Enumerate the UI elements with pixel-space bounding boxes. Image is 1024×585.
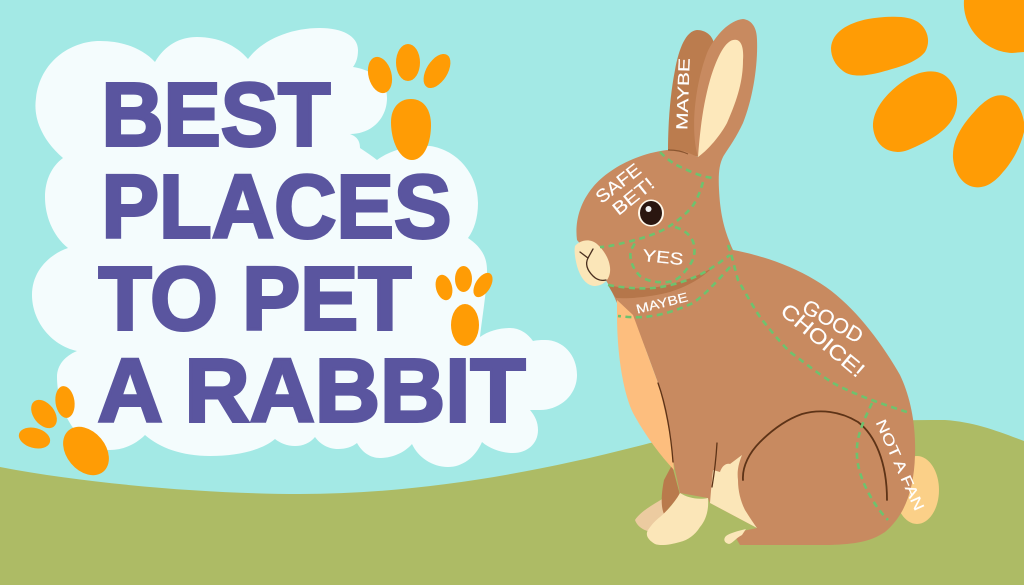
front foot: [647, 493, 708, 545]
chest fur: [710, 455, 757, 528]
far back foot: [635, 498, 672, 532]
zone label: good choice: CHOICE!: [776, 299, 869, 382]
zone label: safe bet: SAFE: [592, 160, 645, 207]
zone label: maybe (ear): MAYBE: [674, 58, 694, 130]
muzzle: [575, 240, 610, 286]
title: TO PET: [98, 250, 412, 350]
nose lines: [580, 249, 606, 280]
zone label: safe bet: [592, 160, 658, 219]
zone label: yes: YES: [642, 246, 684, 269]
paw print, cloud right edge: [433, 266, 497, 346]
rabbit illustration: [575, 19, 939, 545]
title: BEST: [102, 66, 331, 166]
zone label: good choice: GOOD: [798, 295, 867, 348]
eye: [638, 200, 664, 226]
title: PLACES: [102, 158, 452, 258]
title: A RABBIT: [98, 342, 526, 442]
fur and leg lines: [658, 383, 887, 500]
title: [98, 66, 526, 442]
zone label: not a fan: NOT A FAN: [872, 417, 927, 513]
rear front leg shadow: [662, 465, 680, 514]
chest: [617, 300, 674, 470]
hind toe: [724, 529, 746, 544]
large paw print, top right: [831, 0, 1024, 187]
neck shadow: [608, 268, 712, 298]
inner ear: [698, 40, 743, 157]
cloud behind title: [32, 28, 577, 467]
ear base line: [668, 150, 688, 154]
zone label: safe bet: BET!: [608, 174, 658, 219]
rabbit tail: [895, 456, 939, 524]
back ear: [668, 30, 714, 157]
rabbit body and head: [576, 19, 915, 545]
paw print, bottom left: [16, 385, 118, 484]
zone label: maybe (neck): MAYBE: [634, 289, 690, 317]
grassy hill: [0, 420, 1024, 585]
petting zone dashed boundaries: [600, 152, 910, 520]
paw print, above cloud right: [364, 44, 456, 160]
